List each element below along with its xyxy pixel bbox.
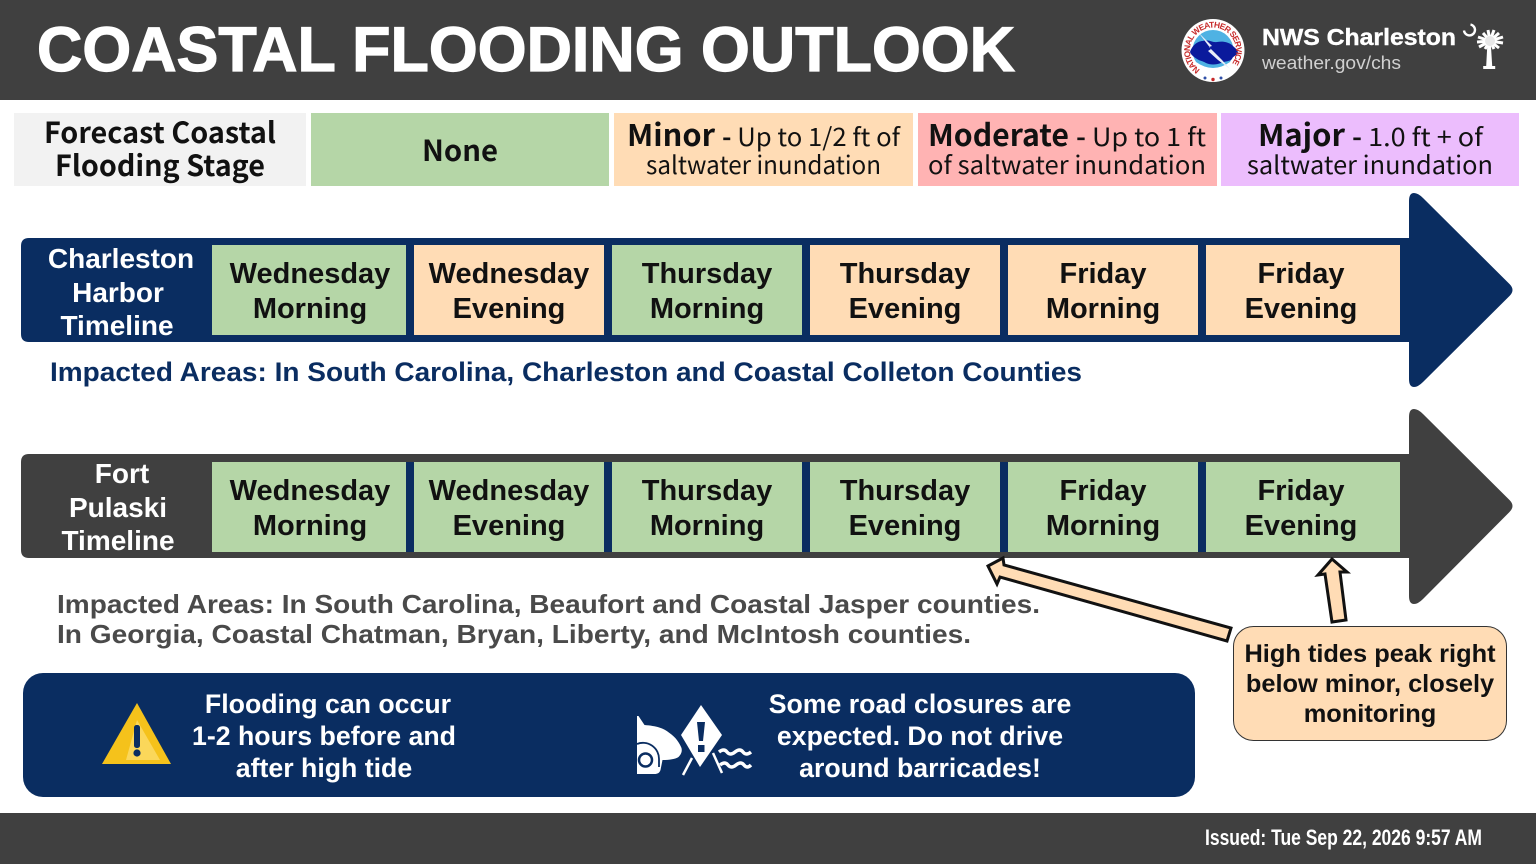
text: Fort Pulaski impacted areas (57, 589, 1040, 649)
cell: Wednesday Evening: Wednesday (429, 258, 589, 290)
text: Charleston impacted areas: Impacted Areas: In South Carolina, Charleston and Coastal Colleton Counties (50, 357, 1082, 387)
callout: high tides: High tides peak right (1244, 640, 1496, 668)
cell: Thursday Morning (612, 462, 802, 552)
text: flooding timing: Flooding can occur (205, 689, 451, 719)
cell: Thursday Morning (612, 245, 802, 335)
icon: NWS logo: NATIONAL WEATHER SERVICE (1184, 22, 1242, 74)
timeline label: Pulaski (69, 492, 167, 523)
legend: stage heading: Forecast Coastal (44, 110, 276, 152)
legend: minor: saltwater inundation (646, 146, 881, 182)
cell: Wednesday Morning (212, 245, 406, 335)
text: road closures: expected. Do not drive (777, 721, 1063, 751)
cell: Thursday Morning: Thursday (642, 258, 772, 290)
callout: high tides: below minor, closely (1246, 670, 1494, 698)
legend: stage heading (14, 110, 306, 186)
cell: Thursday Morning: Morning (650, 510, 764, 542)
cell: Friday Evening (1206, 462, 1400, 552)
legend: minor: - Up to 1/2 ft of (722, 118, 901, 154)
legend: minor: Minor (627, 111, 716, 155)
cell: Friday Morning: Morning (1046, 293, 1160, 325)
cell: Thursday Morning: Thursday (642, 475, 772, 507)
legend: none: None (422, 128, 498, 170)
text: Fort Pulaski impacted areas: In Georgia, Coastal Chatman, Bryan, Liberty, and McIntosh counties. (57, 619, 971, 649)
cell: Wednesday Evening: Evening (453, 293, 565, 325)
text: road closures: around barricades! (799, 753, 1041, 783)
cell: Friday Morning (1008, 245, 1198, 335)
text: flooding timing: after high tide (236, 753, 412, 783)
timeline: Charleston Harbor (21, 193, 1512, 387)
legend: moderate: Moderate (928, 111, 1069, 155)
cell: Wednesday Evening: Evening (453, 510, 565, 542)
cell: Thursday Evening: Evening (849, 510, 961, 542)
cell: Wednesday Morning: Wednesday (230, 258, 390, 290)
icon: car, warning sign and water (637, 705, 751, 775)
title: COASTAL FLOODING OUTLOOK (37, 15, 1015, 85)
icon: warning triangle (102, 703, 171, 764)
arrow: callout to Friday Evening (1318, 559, 1347, 622)
callout: high tides: monitoring (1304, 700, 1436, 728)
legend: minor (614, 111, 913, 186)
legend: major: - 1.0 ft + of (1352, 118, 1484, 154)
cell: Thursday Evening (810, 245, 1000, 335)
timeline label: Harbor (72, 277, 164, 308)
legend: moderate (918, 111, 1217, 186)
timeline label: Charleston (48, 243, 194, 274)
cell: Wednesday Morning: Morning (253, 293, 367, 325)
timeline label: Timeline (60, 310, 174, 341)
cell: Wednesday Evening (414, 245, 604, 335)
icon: crescent and palmetto (1464, 24, 1503, 69)
timeline: Fort Pulaski (21, 409, 1512, 604)
cell: Thursday Evening: Evening (849, 293, 961, 325)
legend: moderate: - Up to 1 ft (1076, 118, 1207, 154)
cell: Thursday Evening: Thursday (840, 258, 970, 290)
text: flooding timing: 1-2 hours before and (192, 721, 456, 751)
cell: Friday Morning: Friday (1059, 258, 1147, 290)
callout: high tides (1234, 626, 1506, 740)
cell: Friday Morning (1008, 462, 1198, 552)
cell: Friday Evening: Evening (1245, 293, 1357, 325)
cell: Friday Evening: Evening (1245, 510, 1357, 542)
cell: Wednesday Morning: Wednesday (230, 475, 390, 507)
text: Fort Pulaski impacted areas: Impacted Areas: In South Carolina, Beaufort and Coastal Jasper counties. (57, 589, 1040, 619)
header band (0, 0, 1536, 100)
cell: Wednesday Evening: Wednesday (429, 475, 589, 507)
panel: safety messages (23, 673, 1195, 797)
timeline label: Fort (95, 458, 149, 489)
cell: Thursday Evening (810, 462, 1000, 552)
cell: Thursday Evening: Thursday (840, 475, 970, 507)
cell: Wednesday Morning: Morning (253, 510, 367, 542)
text: road closures: Some road closures are (769, 689, 1071, 719)
website: weather.gov/chs (1261, 53, 1401, 73)
legend: major: Major (1258, 111, 1346, 155)
legend: none (311, 113, 609, 186)
cell: Friday Evening: Friday (1257, 475, 1345, 507)
cell: Friday Morning: Morning (1046, 510, 1160, 542)
NWS office name: NWS Charleston (1262, 24, 1456, 50)
legend: major: saltwater inundation (1247, 146, 1493, 182)
arrow: callout to Thursday Evening (988, 558, 1231, 641)
cell: Friday Morning: Friday (1059, 475, 1147, 507)
legend: moderate: of saltwater inundation (928, 146, 1206, 182)
navy cell separators (406, 462, 414, 552)
cell: Thursday Morning: Morning (650, 293, 764, 325)
legend: major (1221, 111, 1519, 186)
legend: stage heading: Flooding Stage (55, 143, 265, 185)
arrow: Charleston timeline (21, 193, 1512, 387)
arrow: Fort Pulaski timeline (21, 409, 1512, 604)
cell: Wednesday Morning (212, 462, 406, 552)
cell: Friday Evening (1206, 245, 1400, 335)
footer band (0, 813, 1536, 864)
cell: Wednesday Evening (414, 462, 604, 552)
timeline label: Timeline (61, 525, 175, 556)
cell: Friday Evening: Friday (1257, 258, 1345, 290)
